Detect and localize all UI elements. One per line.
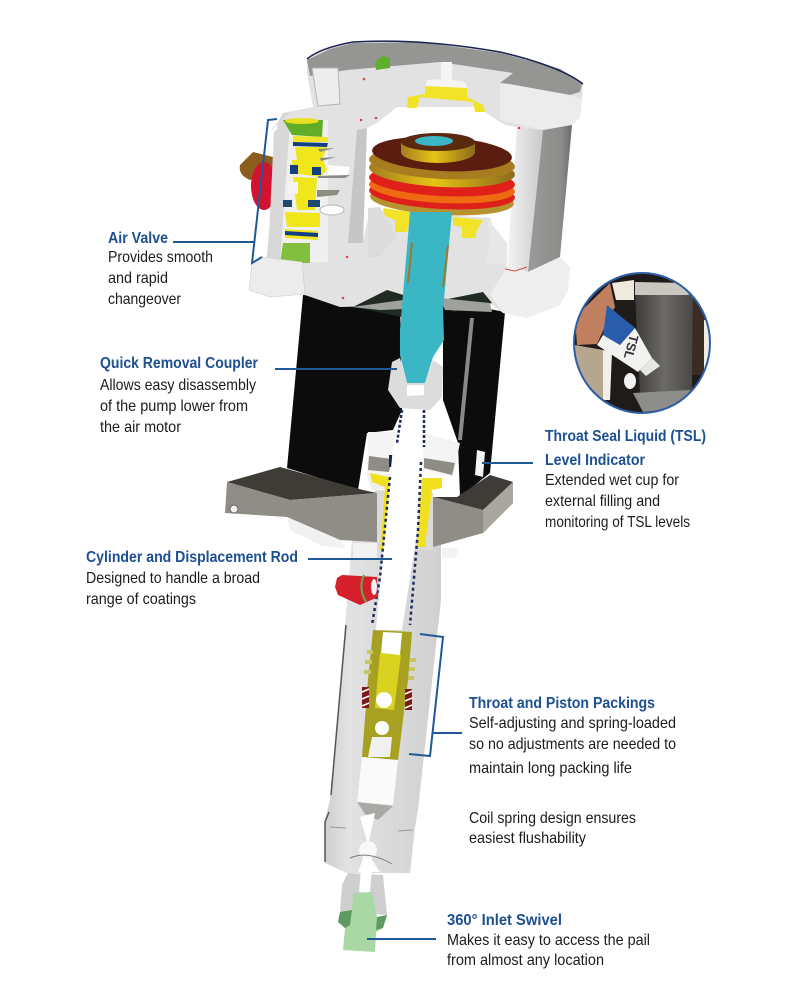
text: air valve: Provides smooth <box>108 249 213 266</box>
panel: top cap and yellow seal <box>407 62 485 112</box>
inset photo: TSL bottle <box>570 270 715 416</box>
brown knob <box>240 152 277 180</box>
red cap <box>251 162 277 210</box>
yellow spool and blue seals <box>283 136 328 240</box>
wall slot <box>348 128 367 243</box>
green bottom <box>280 243 310 263</box>
panel: inlet swivel <box>338 868 387 952</box>
text: cylinder and displacement rod: Designed to handle a broad <box>86 570 260 587</box>
lower stud <box>375 721 389 735</box>
panel: lower check ball <box>350 841 392 890</box>
text: throat and piston packings: Self-adjusting and spring-loaded <box>469 715 676 732</box>
panel: displacement rod <box>372 410 424 630</box>
right column shaded side <box>528 125 572 272</box>
callout lines <box>173 119 533 939</box>
panel: lower chamber arches <box>352 207 507 317</box>
text: throat seal liquid: Throat Seal Liquid (TSL) <box>545 428 706 445</box>
lid corner boss <box>312 68 340 106</box>
valve bore <box>280 120 328 263</box>
bottle label text: TSL <box>621 333 642 361</box>
lid front lip <box>500 83 582 130</box>
text: quick removal coupler: Quick Removal Coupler <box>100 355 258 372</box>
panel: quick removal coupler body <box>388 358 443 410</box>
panel: yellow throat packing <box>370 473 442 550</box>
green lid fitting <box>375 56 390 70</box>
lid top surface <box>307 42 582 95</box>
text: air valve: and rapid <box>108 270 168 287</box>
white slot and fins <box>317 148 350 215</box>
icon: red side fitting <box>335 575 378 605</box>
text: inlet swivel: from almost any location <box>447 952 604 969</box>
text: throat seal liquid: Level Indicator <box>545 452 645 469</box>
text: throat and piston packings: easiest flushability <box>469 830 586 847</box>
text: throat seal liquid: Extended wet cup for <box>545 472 680 489</box>
panel: white piston body <box>357 757 398 872</box>
right column lit side <box>507 127 543 272</box>
top yellow ring <box>285 118 319 124</box>
text: throat and piston packings <box>469 695 676 847</box>
text: throat seal liquid: external filling and <box>545 493 660 510</box>
text: throat seal liquid: monitoring of TSL levels <box>545 514 690 531</box>
panel: throat and piston section <box>362 630 416 760</box>
valve column repeat <box>268 118 289 260</box>
panel: air motor housing <box>249 41 583 318</box>
text: air valve: changeover <box>108 291 182 308</box>
text: inlet swivel: 360° Inlet Swivel <box>447 912 562 929</box>
mounting foot <box>249 257 305 297</box>
text: quick removal coupler: the air motor <box>100 419 182 436</box>
spring coil <box>362 687 412 710</box>
icon: TSL level indicator window <box>475 450 485 477</box>
text: quick removal coupler: Allows easy disassembly <box>100 377 256 394</box>
text: throat and piston packings: maintain long packing life <box>469 760 632 777</box>
piston chamber <box>362 107 517 267</box>
pump cutaway infographic <box>86 40 711 968</box>
text: air valve <box>108 230 213 308</box>
text: throat and piston packings: so no adjustments are needed to <box>469 736 676 753</box>
text: throat seal liquid <box>545 428 706 531</box>
text: cylinder and displacement rod <box>86 549 298 608</box>
panel: air motor black shroud <box>287 295 505 497</box>
packing teeth <box>364 650 416 680</box>
text: throat and piston packings: Coil spring design ensures <box>469 810 636 827</box>
panel: wet cup <box>366 432 460 490</box>
panel: brass guide lines <box>408 243 448 287</box>
text: air valve: Air Valve <box>108 230 168 247</box>
panel: air valve <box>240 112 350 297</box>
text: inlet swivel: Makes it easy to access the pail <box>447 932 650 949</box>
text: inlet swivel <box>447 912 650 969</box>
text: cylinder and displacement rod: range of coatings <box>86 591 196 608</box>
green top <box>283 120 323 137</box>
text: cylinder and displacement rod: Cylinder and Displacement Rod <box>86 549 298 566</box>
panel: mount bracket <box>225 467 513 558</box>
text: throat and piston packings: Throat and Piston Packings <box>469 695 655 712</box>
text: quick removal coupler: of the pump lower from <box>100 398 248 415</box>
panel: lower cylinder <box>325 490 441 873</box>
panel: piston <box>368 133 516 219</box>
panel: cyan rod <box>400 212 452 383</box>
air hole dots <box>342 78 520 299</box>
lower right foot <box>490 257 570 318</box>
piston ball <box>376 692 392 708</box>
text: quick removal coupler <box>100 355 258 436</box>
valve column <box>267 118 290 260</box>
